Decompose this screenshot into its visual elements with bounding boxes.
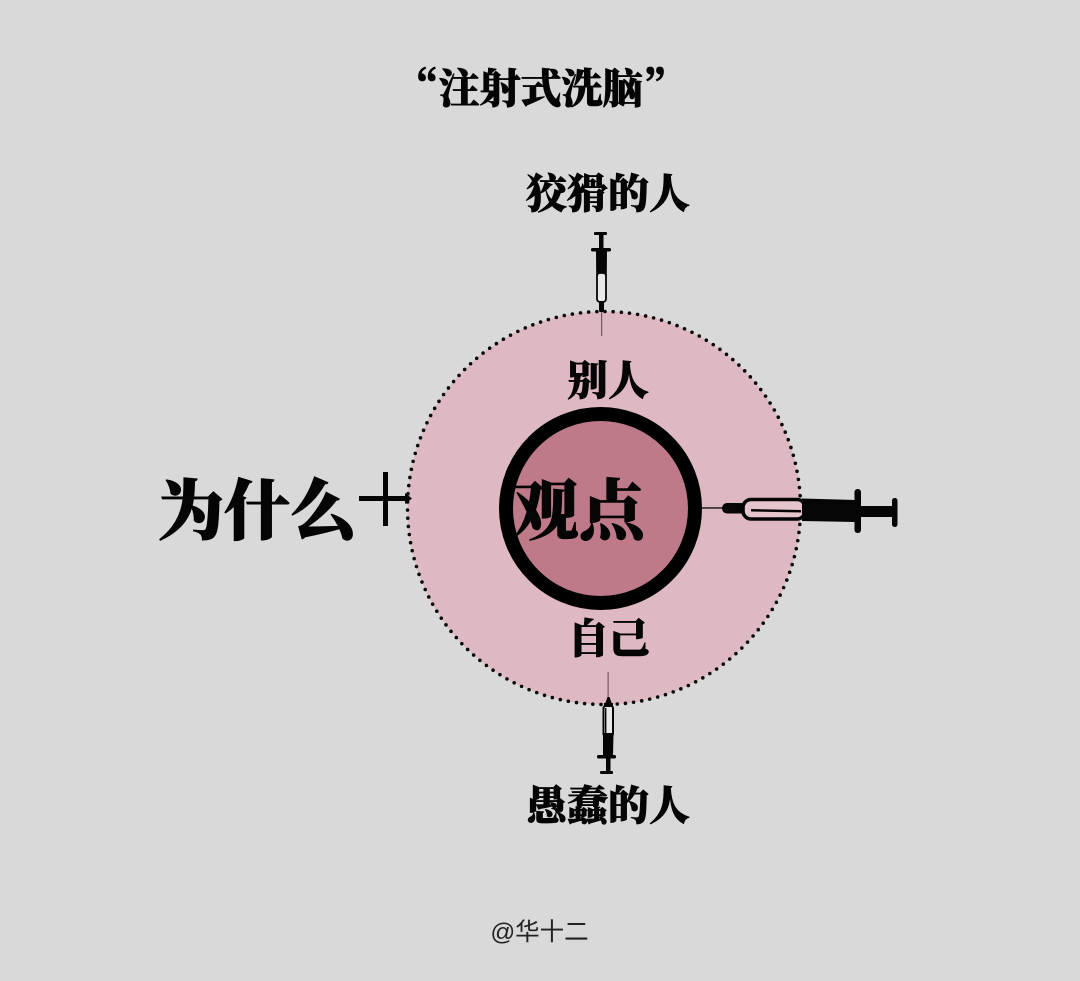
icon: syringe right: [702, 489, 898, 533]
icon: syringe top: [591, 232, 611, 336]
label: 愚蠢的人: 愚蠢的人: [526, 773, 690, 832]
label: 自己: 自己: [568, 606, 650, 665]
label: 为什么: 为什么: [158, 458, 362, 553]
label: 观点: 观点: [513, 458, 651, 553]
arrow: plus mark pointing into circle: [359, 472, 412, 526]
icon: syringe bottom: [597, 672, 616, 774]
credit: @华十二: [490, 918, 589, 946]
title: “注射式洗脑”: [398, 56, 684, 115]
outer circle: others: [408, 312, 800, 704]
label: 狡猾的人: 狡猾的人: [526, 161, 690, 220]
label: 别人: 别人: [567, 348, 649, 407]
inner circle: viewpoint: [506, 414, 695, 603]
